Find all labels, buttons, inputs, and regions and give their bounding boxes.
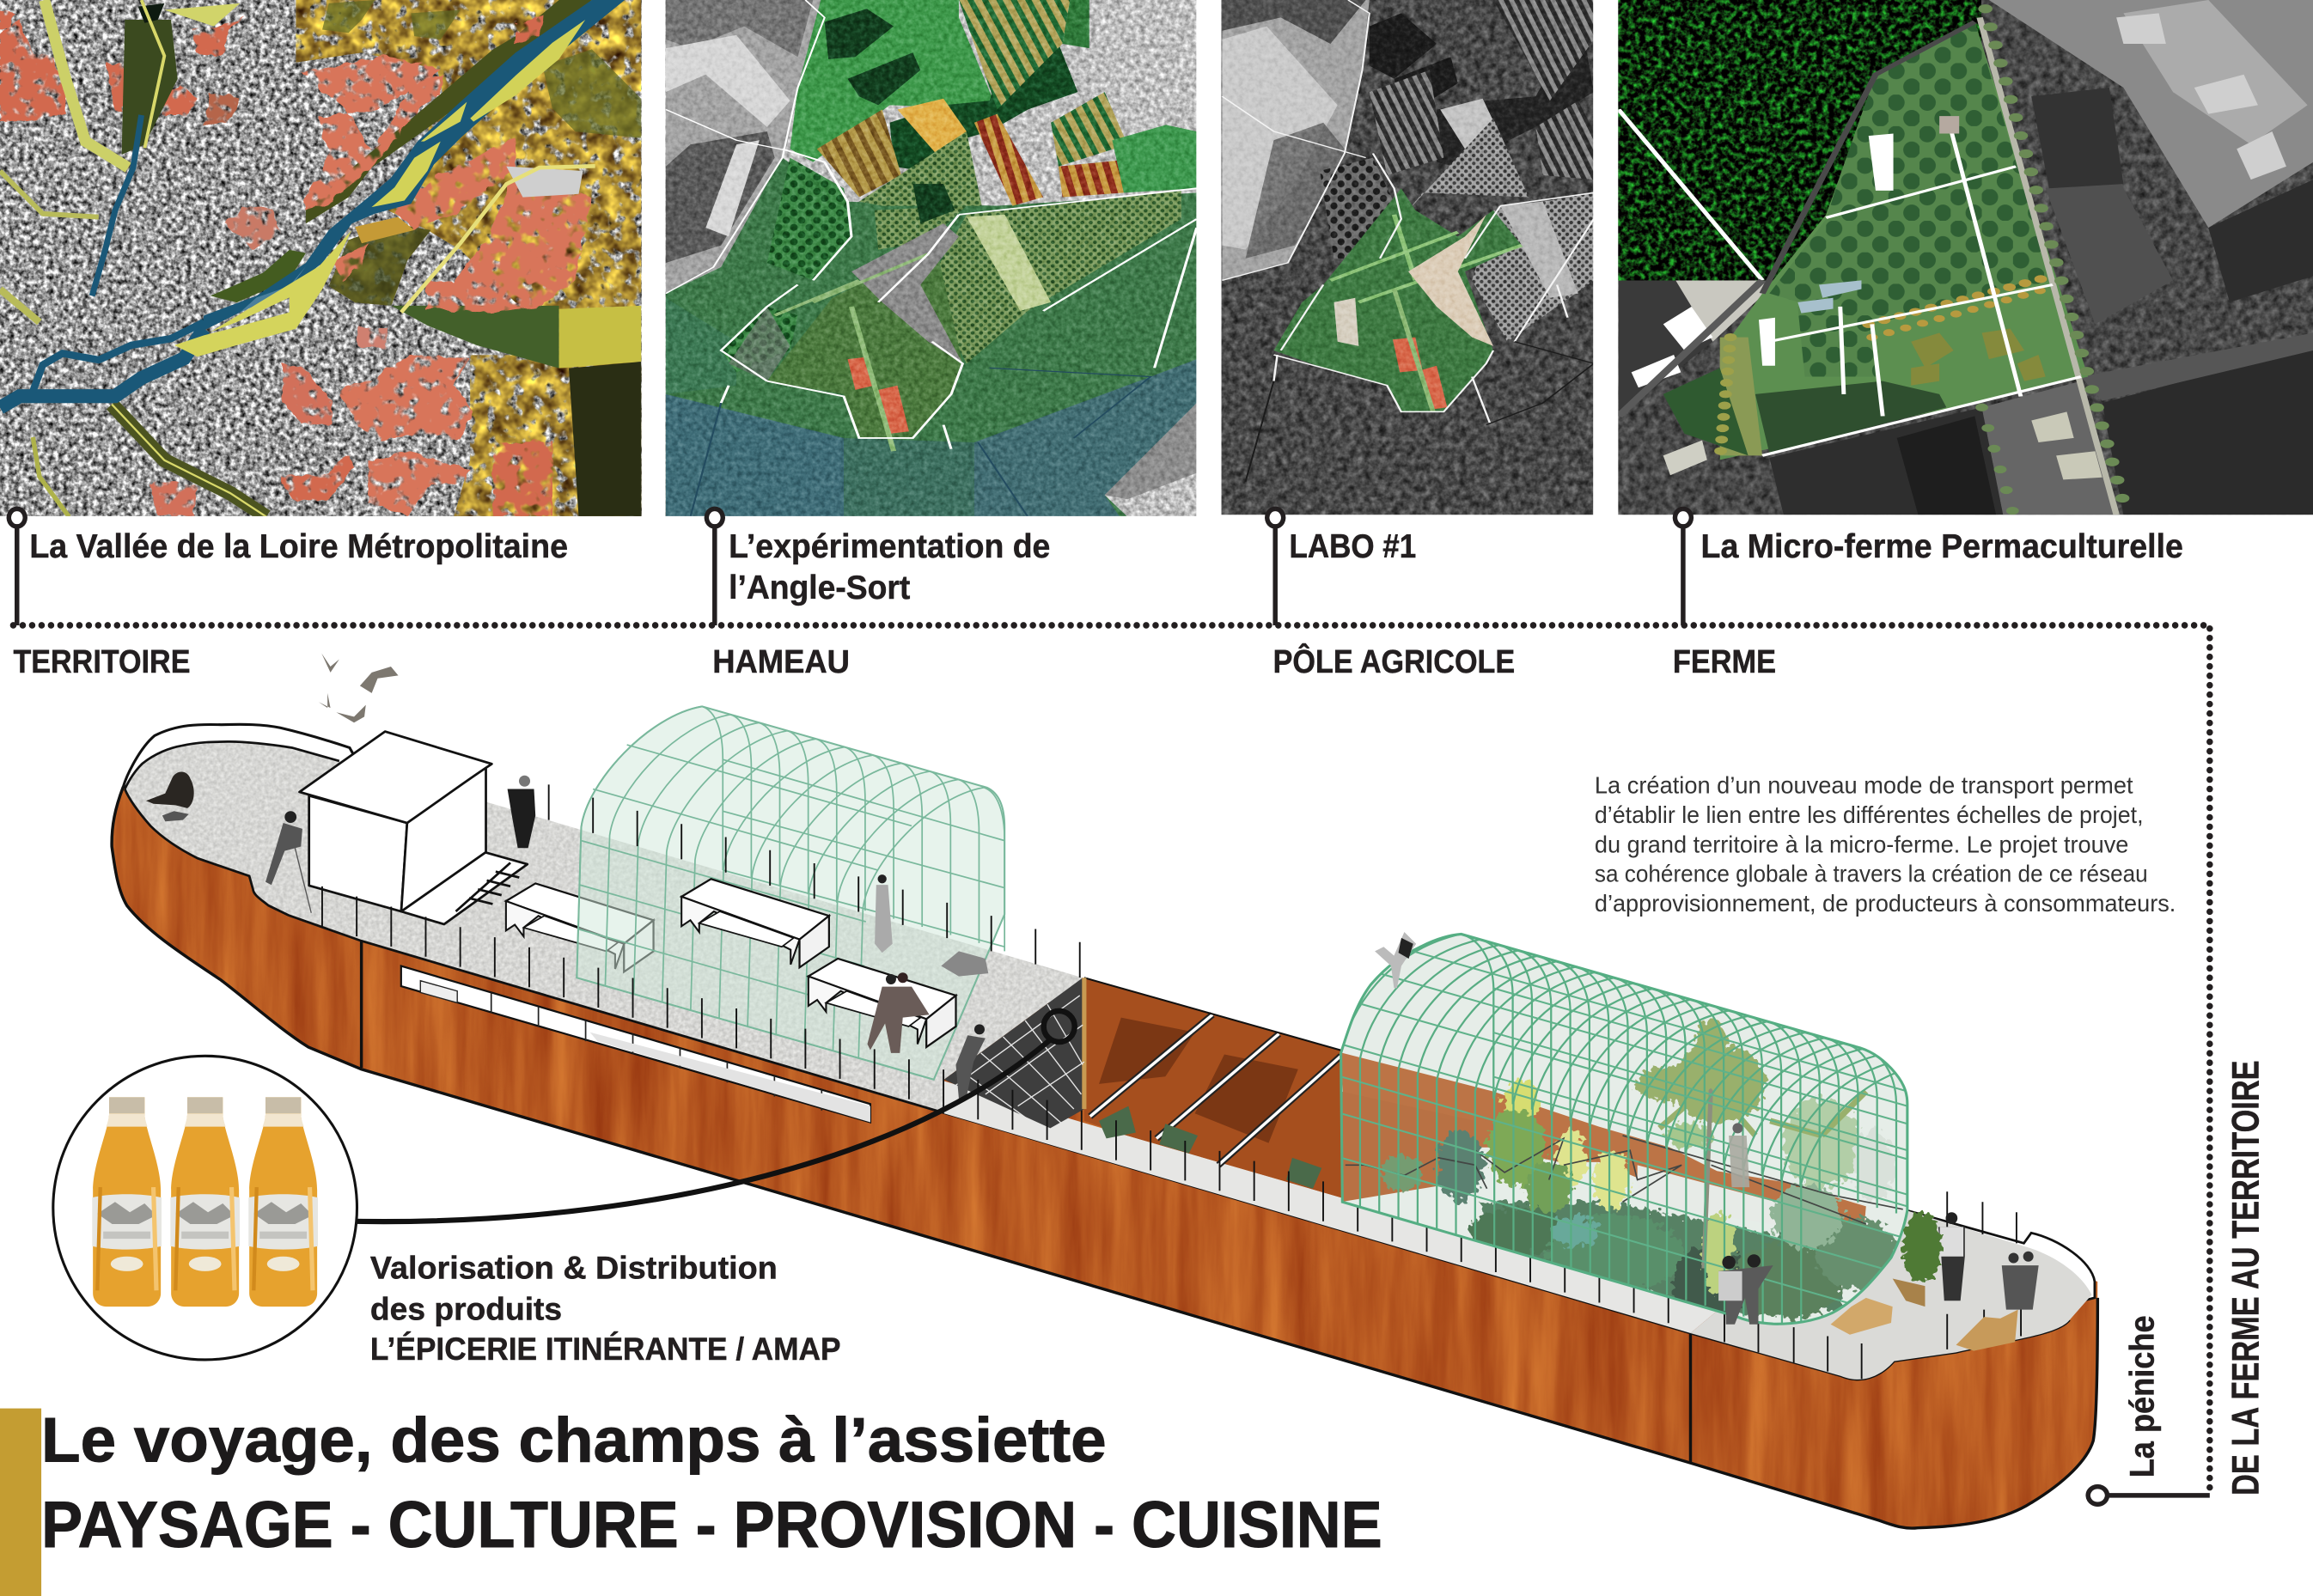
- title: PAYSAGE - CULTURE - PROVISION - CUISINE: [41, 1489, 1382, 1562]
- rust roof panels: [1084, 978, 1346, 1197]
- birds: [319, 654, 399, 722]
- callout: juice bottles: [53, 1056, 357, 1360]
- label: La Vallée de la Loire Métropolitaine: La Vallée de la Loire Métropolitaine: [29, 528, 568, 565]
- stern deck: [1690, 1209, 2095, 1380]
- bottle 2: [170, 1097, 240, 1307]
- label: La Micro-ferme Permaculturelle: La Micro-ferme Permaculturelle: [1701, 528, 2183, 565]
- marker: Pôle agricole timeline pin: [1267, 509, 1284, 625]
- figures: people on deck: [146, 772, 2039, 1325]
- text block: description: La création d’un nouveau mode de transport permet: [1595, 772, 2133, 799]
- label: Valorisation & Distribution: L’ÉPICERIE ITINÉRANTE / AMAP: [370, 1331, 841, 1367]
- hull seams: [362, 940, 1690, 1463]
- scale label: PÔLE AGRICOLE: PÔLE AGRICOLE: [1273, 643, 1515, 680]
- label: L'expérimentation de l'Angle-Sort: L’expérimentation de: [729, 528, 1050, 565]
- scale label: FERME: FERME: [1673, 644, 1776, 680]
- hull outline: [112, 787, 2097, 1528]
- cabin and stair well: [300, 732, 528, 924]
- hull: [103, 737, 2109, 1541]
- greenhouse 2 frame: [1340, 933, 1909, 1325]
- panel: L'Angle-Sort map: [665, 0, 1197, 517]
- greenhouse 2 interior: [1335, 929, 1913, 1327]
- label: L'expérimentation de l'Angle-Sort: l’Angle-Sort: [729, 570, 910, 606]
- marker: Hameau timeline pin: [706, 509, 723, 625]
- greenhouse 1: [577, 706, 1004, 1080]
- illustration: péniche barge: [103, 654, 2109, 1541]
- panel: LABO #1 map: [1222, 0, 1594, 515]
- link curve to bottle: [342, 1039, 1050, 1221]
- gold accent bar: [0, 1409, 41, 1596]
- label: DE LA FERME AU TERRITOIRE: DE LA FERME AU TERRITOIRE: [2225, 1060, 2267, 1495]
- bottle 3: [248, 1097, 318, 1307]
- stern furniture: [1831, 1212, 2018, 1351]
- hull window band: [401, 966, 870, 1123]
- bench-table 3: [809, 959, 956, 1047]
- dotted timeline: [13, 625, 2210, 1495]
- deck: [125, 742, 1083, 1110]
- label: LABO #1: LABO #1: [1290, 528, 1416, 565]
- planters on roof: [1099, 1106, 1321, 1189]
- label: Valorisation & Distribution: Valorisation & Distribution: [370, 1251, 778, 1286]
- marker: Territoire timeline pin: [9, 509, 25, 625]
- panel: La Vallée de la Loire map: [0, 0, 642, 517]
- deck edge line: [125, 789, 2070, 1380]
- panel: micro-ferme map: [1618, 0, 2313, 515]
- text block: description: du grand territoire à la micro-ferme. Le projet trouve: [1595, 831, 2128, 857]
- bottle 1: [92, 1097, 162, 1307]
- railing posts: [322, 886, 2021, 1379]
- rear railing posts: [549, 784, 1080, 978]
- glazed floor grid: [944, 978, 1084, 1136]
- scale label: TERRITOIRE: TERRITOIRE: [13, 644, 190, 680]
- bench-table 1: [506, 883, 654, 972]
- text block: description: d’établir le lien entre les différentes échelles de projet,: [1595, 801, 2144, 828]
- crane on greenhouse: [1375, 932, 1416, 988]
- text block: description: d’approvisionnement, de producteurs à consommateurs.: [1595, 890, 2176, 917]
- title: Le voyage, des champs à l’assiette: [41, 1405, 1107, 1475]
- bow deck outline: [123, 724, 369, 787]
- text block: description: sa cohérence globale à travers la création de ce réseau: [1595, 861, 2148, 887]
- bench-table 2: [681, 879, 829, 967]
- label: Valorisation & Distribution: des produits: [370, 1292, 562, 1327]
- marker: Ferme timeline pin: [1675, 509, 1691, 625]
- marker: péniche pin: [2088, 1487, 2210, 1504]
- label: La péniche: La péniche: [2124, 1315, 2162, 1477]
- link circle: [1044, 1011, 1075, 1042]
- walkway: [944, 1081, 1718, 1333]
- scale label: HAMEAU: HAMEAU: [712, 644, 850, 680]
